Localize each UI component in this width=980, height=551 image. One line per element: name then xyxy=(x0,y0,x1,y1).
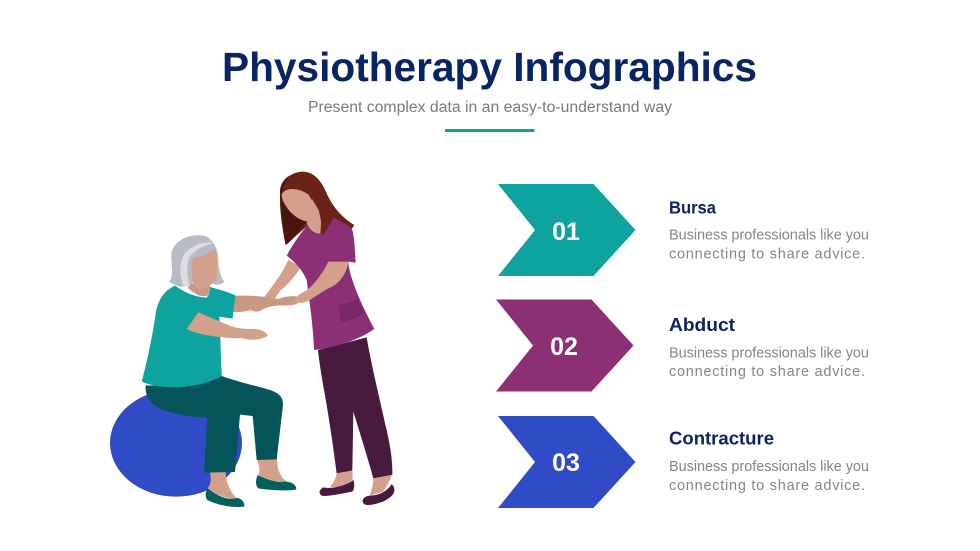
description Bursa: Business professionals like you xyxy=(669,228,869,244)
chevron 01 xyxy=(498,184,636,276)
chevron 02 xyxy=(496,300,634,392)
nurse left ankle xyxy=(330,471,353,487)
nurse tunic pocket xyxy=(339,299,364,322)
subtitle: Present complex data in an easy-to-understand way xyxy=(308,99,672,116)
nurse near arm xyxy=(295,262,348,303)
patient face xyxy=(192,248,217,288)
nurse left shoe xyxy=(320,480,354,496)
nurse tunic xyxy=(287,218,374,350)
title: Physiotherapy Infographics xyxy=(222,44,757,90)
nurse trousers xyxy=(318,337,392,478)
patient far shoe xyxy=(256,475,296,490)
patient far ankle xyxy=(257,458,287,482)
nurse hair shadow xyxy=(280,176,307,245)
description Contracture: Business professionals like you xyxy=(669,459,869,475)
nurse upper body xyxy=(280,172,374,350)
nurse far arm xyxy=(264,260,301,298)
heading Contracture: Contracture xyxy=(669,428,774,448)
nurse right ankle xyxy=(370,475,392,496)
exercise ball xyxy=(110,389,242,497)
number 02: 02 xyxy=(550,333,578,361)
nurse hair xyxy=(280,172,354,245)
nurse right shoe xyxy=(363,484,394,505)
description Abduct: connecting to share advice. xyxy=(669,364,865,380)
patient near ankle xyxy=(208,472,237,499)
chevron 03 xyxy=(498,416,636,508)
description Bursa: connecting to share advice. xyxy=(669,246,865,262)
patient shirt xyxy=(142,286,235,387)
nurse feet xyxy=(320,471,394,505)
patient far arm xyxy=(233,296,302,312)
patient hair highlight xyxy=(180,243,214,287)
nurse neck xyxy=(307,198,322,233)
patient hair xyxy=(169,235,224,287)
heading Bursa: Bursa xyxy=(669,198,716,218)
title accent bar xyxy=(445,129,534,132)
patient near shoe xyxy=(206,488,244,507)
patient near arm xyxy=(187,312,268,340)
description Contracture: connecting to share advice. xyxy=(669,478,865,494)
patient neck xyxy=(188,283,210,296)
patient xyxy=(142,235,302,507)
description Abduct: Business professionals like you xyxy=(669,346,869,362)
row 1: Bursa xyxy=(498,184,869,276)
heading Abduct: Abduct xyxy=(669,315,735,335)
patient head xyxy=(169,235,224,296)
patient trousers xyxy=(146,376,283,473)
nurse xyxy=(280,172,394,505)
row 2: Abduct xyxy=(496,300,869,392)
row 3: Contracture xyxy=(498,416,869,508)
illustration: physiotherapist helping patient on exercise ball xyxy=(110,172,394,507)
patient feet xyxy=(206,458,296,507)
number 03: 03 xyxy=(552,449,580,477)
number 01: 01 xyxy=(552,218,580,246)
nurse hair front lock xyxy=(312,194,333,237)
nurse face xyxy=(282,189,312,221)
